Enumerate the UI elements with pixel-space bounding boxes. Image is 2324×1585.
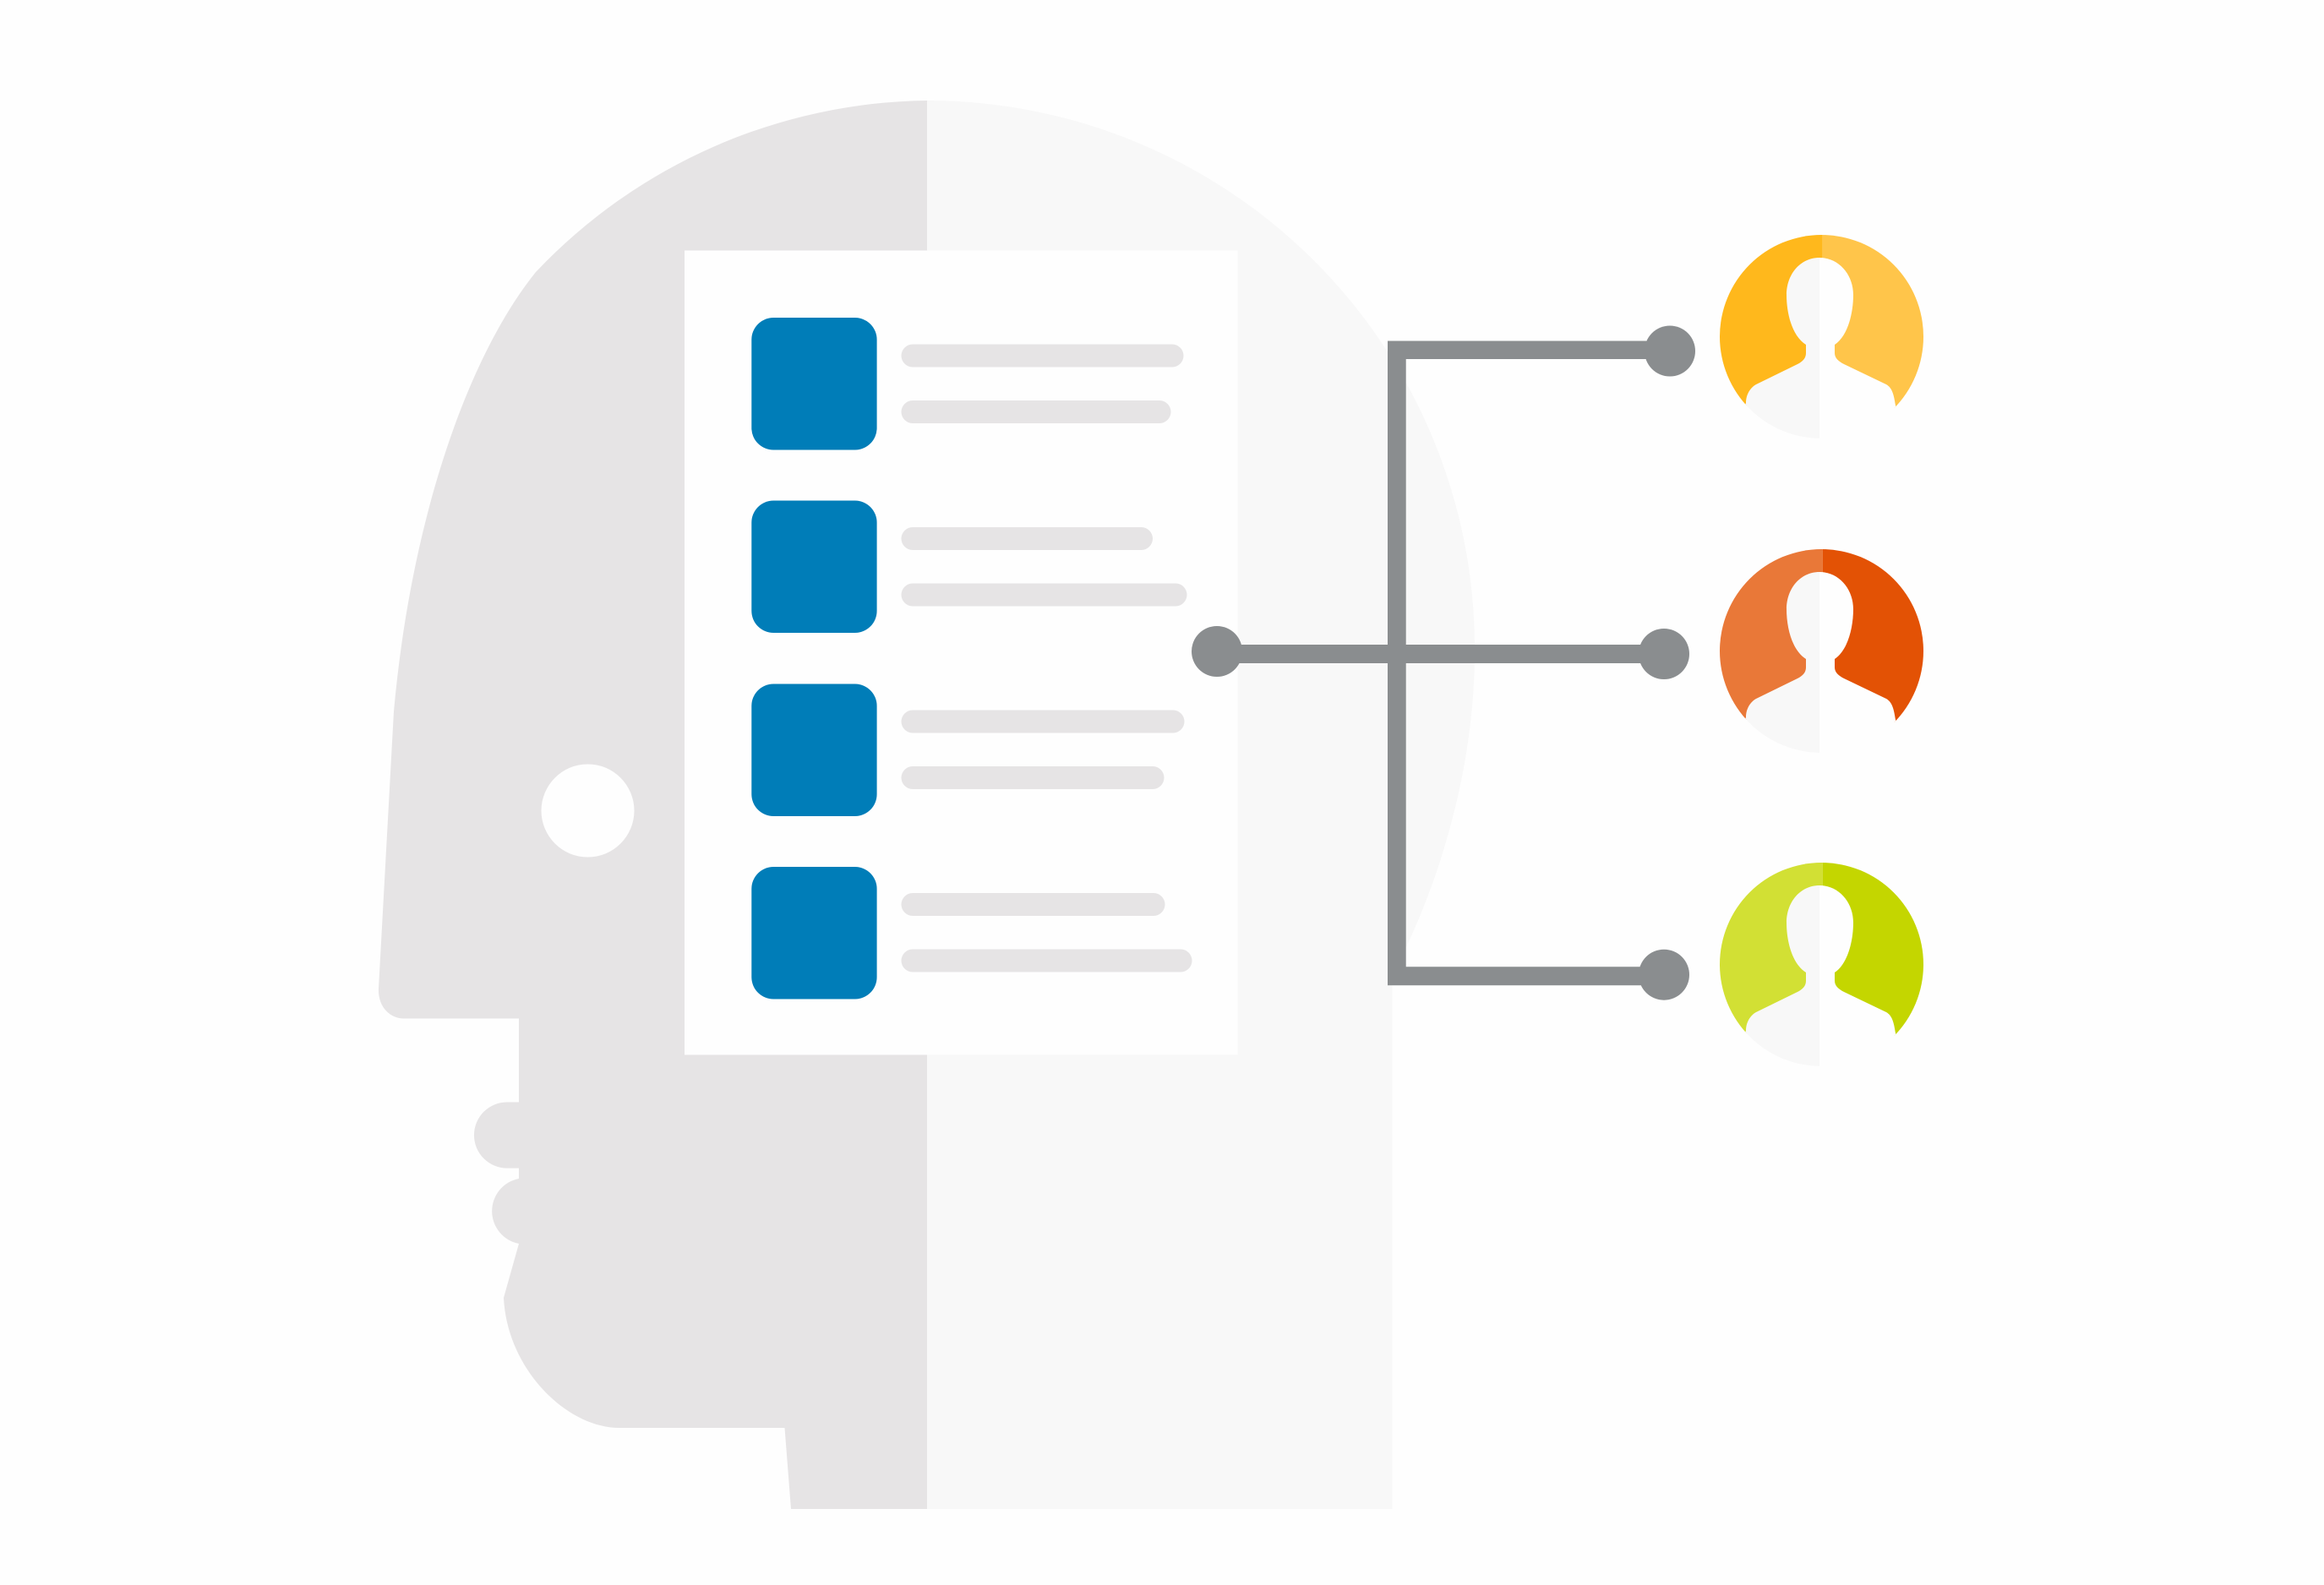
middle node <box>1639 629 1689 679</box>
connector lines <box>1192 326 1695 1000</box>
head: eye <box>541 764 634 857</box>
icon: green persona <box>1720 863 1923 1036</box>
list row 3 <box>751 684 1185 816</box>
icon: yellow persona <box>1720 235 1923 408</box>
list row 1 <box>751 318 1183 449</box>
panel background <box>685 250 1237 1054</box>
source node <box>1192 626 1242 677</box>
icon: orange persona <box>1720 549 1923 722</box>
top node <box>1645 326 1695 377</box>
list row 4 <box>751 867 1192 999</box>
list row 2 <box>751 500 1187 633</box>
trunk and branches <box>1217 341 1670 985</box>
document panel <box>685 250 1237 1054</box>
head: dark left half with face profile <box>379 101 927 1509</box>
head silhouette <box>379 101 1475 1509</box>
bottom node <box>1639 950 1689 1000</box>
head: light right half <box>927 101 1475 1509</box>
